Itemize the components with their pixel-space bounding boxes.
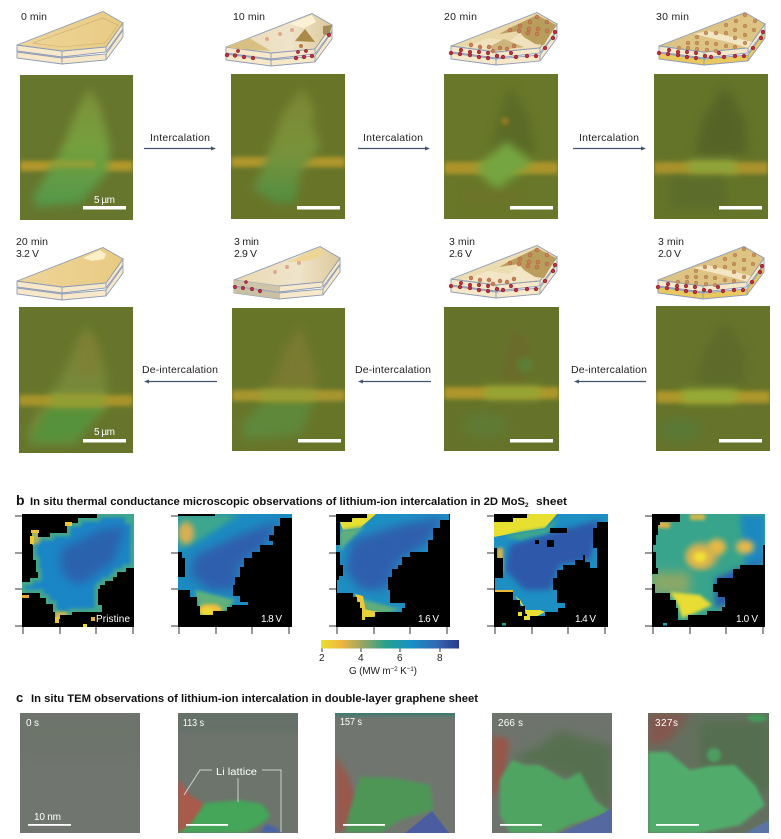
photo: 10 min optical image [231,74,345,219]
colour bar legend [319,640,459,677]
icon: 0 min sheet stack [17,12,123,64]
arrow: intercalation 3: Intercalation [579,132,639,144]
icon: 30 min sheet stack [657,12,765,65]
label: 10 nm: 10 nm [34,812,61,823]
colour bar legend: 4 [358,653,364,664]
heatmap: 1.6 V [334,512,452,628]
TEM image: 157 s [335,713,455,833]
scale bar [343,824,385,826]
label: 1.4 V: 1.4 V [575,614,596,625]
scale bar [298,439,341,442]
heading: panel c: In situ TEM observations of lithium-ion intercalation in double-layer graphene sheet [31,693,478,705]
arrow: de-intercalation 2 [355,364,431,384]
colour bar legend: 2 [319,653,325,664]
photo: 0 min optical image [20,75,133,220]
axis ticks: 1.8 V [171,516,289,634]
TEM image: 266 s [492,713,612,833]
label: 3 min 2.9 V: 3 min [234,236,259,248]
heading: panel b: b [16,492,25,508]
heatmap: 1.4 V [492,512,610,628]
colour bar legend: ) [414,666,417,677]
scale bar: 5 µm [83,206,126,210]
icon: 20 min 3.2 V sheet stack [17,248,123,300]
axis ticks: 1.0 V [645,516,763,634]
arrow: intercalation 2 [358,132,430,150]
callout: Li lattice: Li lattice [216,767,257,778]
arrow: intercalation 3 [573,132,646,150]
label: 20 min: 20 min [444,11,477,23]
photo: 2.6 V optical image [444,307,559,451]
label: 20 min 3.2 V: 20 min [16,236,48,248]
text: 2.9 V [234,248,257,260]
scale bar [510,206,553,210]
label: 0 min: 0 min [21,11,47,23]
photo: 20 min optical image [444,74,558,219]
label: 30 min: 30 min [656,11,689,23]
arrow: de-intercalation 2: De-intercalation [355,364,431,376]
label: 5 µm: 5 µm [94,195,115,206]
label: 266 s: 266 s [498,718,523,729]
arrow: de-intercalation 3: De-intercalation [571,364,647,376]
icon: 3 min 2.6 V sheet stack [449,246,557,298]
photo: 3.2 V optical image [19,307,133,453]
scale bar: 10 nm [28,824,71,826]
axis ticks: 1.4 V [487,516,605,634]
colour bar legend: −1 [407,666,414,673]
text: 2.0 V [658,248,681,260]
heatmap: Pristine [20,512,136,628]
axis ticks: Pristine [15,516,133,634]
TEM image: 0 s [20,713,140,833]
scale bar [719,439,762,442]
heading: panel b: 2 [525,502,529,509]
label: 5 µm: 5 µm [94,427,115,438]
colour bar legend: G (MW m [349,666,391,677]
arrow: intercalation 1: Intercalation [150,132,210,144]
label: 1.8 V: 1.8 V [261,614,282,625]
colour bar legend: 6 [397,653,403,664]
arrow: de-intercalation 1: De-intercalation [142,364,218,376]
label: 113 s: 113 s [183,718,204,729]
scale bar: 5 µm [83,439,126,442]
heading: panel b [16,492,567,509]
scale bar [186,824,228,826]
label: 3 min 2.0 V: 3 min [658,236,684,248]
label: 3 min 2.6 V: 3 min [449,236,475,248]
arrow: intercalation 2: Intercalation [363,132,423,144]
heading: panel b: In situ thermal conductance microscopic observations of lithium-ion intercalation in 2D MoS [30,496,525,508]
scale bar [510,439,553,442]
scale bar [297,206,340,210]
axis ticks: 1.6 V [329,516,447,634]
heading: panel c: c [16,690,23,705]
label: 1.0 V: 1.0 V [736,614,758,625]
label: 157 s: 157 s [340,717,362,728]
label: 0 s: 0 s [26,718,39,729]
label: 327 s: 327s [655,718,678,729]
photo: 2.9 V optical image [232,308,345,451]
arrow: intercalation 1 [144,132,216,150]
scale bar [719,206,762,210]
icon: 3 min 2.9 V sheet stack [233,246,340,299]
icon: 10 min sheet stack [225,14,332,66]
text: 2.6 V [449,248,472,260]
TEM image: 113 s [178,713,298,833]
TEM image: 327 s [648,713,769,833]
heatmap: 1.0 V [650,512,767,628]
colour bar legend: 8 [437,653,443,664]
arrow: de-intercalation 3 [571,364,647,384]
arrow: de-intercalation 1 [142,364,218,384]
label: Pristine: Pristine [96,614,130,625]
colour bar legend: K [398,666,407,677]
photo: 30 min optical image [654,74,768,219]
colour bar legend: −2 [390,666,398,673]
label: 10 min: 10 min [233,11,265,23]
heading: panel b: sheet [536,496,567,508]
label: 1.6 V: 1.6 V [418,614,439,625]
photo: 2.0 V optical image [656,306,770,451]
scale bar [500,824,542,826]
scale bar [656,824,699,826]
heatmap: 1.8 V [176,512,294,628]
text: 3.2 V [16,248,39,260]
icon: 3 min 2.0 V sheet stack [656,246,764,299]
icon: 20 min sheet stack [449,12,557,65]
